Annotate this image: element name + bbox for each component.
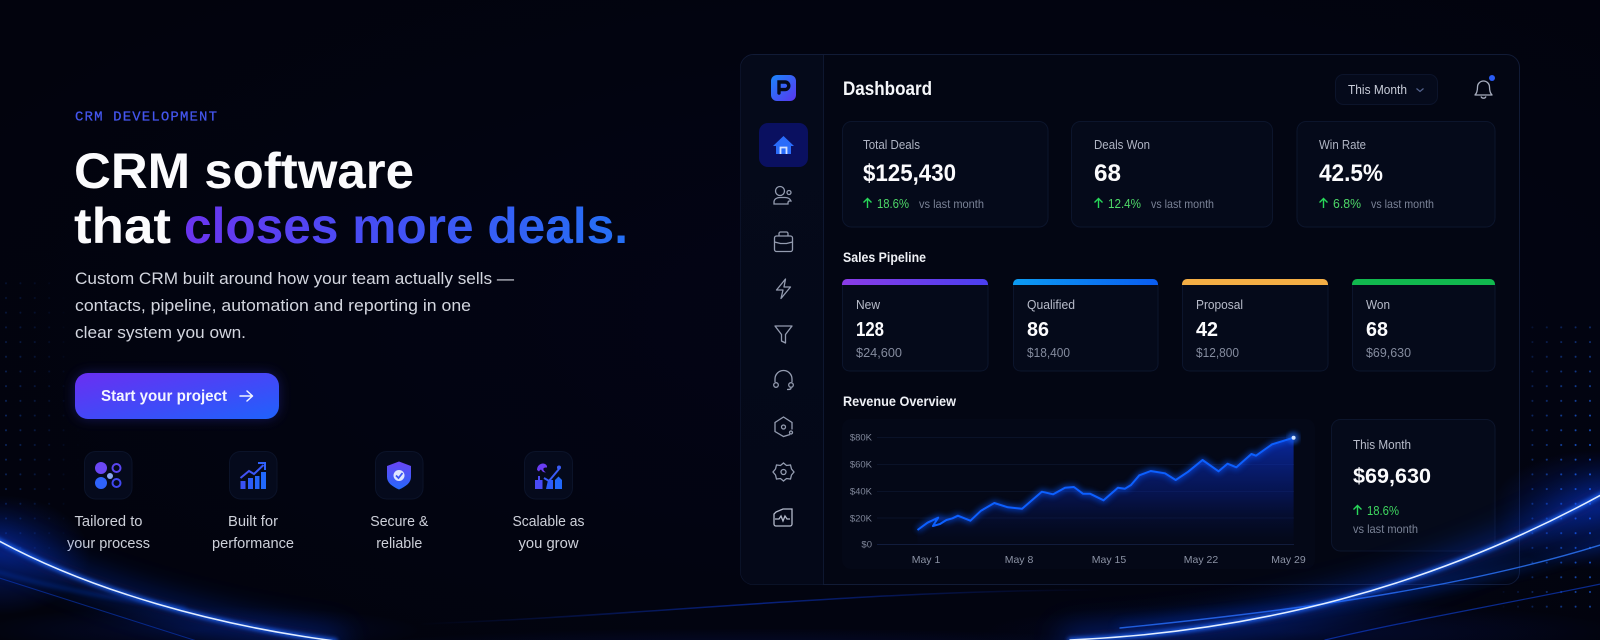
stat card: deals won: 68 — [1094, 160, 1121, 187]
pipeline card: won: 68 — [1366, 319, 1388, 341]
feature: scalable as you grow — [512, 452, 584, 552]
chart gridlines — [877, 438, 1294, 544]
dropdown: this month: This Month — [1348, 82, 1407, 97]
title: CRM software — [74, 143, 414, 199]
chart x axis labels: May 29 — [1271, 554, 1306, 566]
feature: secure and reliable — [370, 452, 429, 552]
chart end marker — [1288, 432, 1300, 444]
dropdown: this month — [1336, 74, 1438, 104]
chart y axis labels: $40K — [850, 486, 873, 498]
pipeline card: proposal: Proposal — [1196, 298, 1243, 312]
heading: revenue overview: Revenue Overview — [843, 394, 956, 409]
stat card: this month: 18.6% — [1367, 503, 1399, 518]
pipeline card: new — [842, 279, 988, 371]
feature: built for performance: Built for — [228, 514, 278, 530]
stat card: total deals: vs last month — [919, 197, 984, 211]
pipeline card: won: Won — [1366, 298, 1390, 312]
eyebrow: CRM DEVELOPMENT — [75, 110, 217, 126]
stat card: win rate: 42.5% — [1319, 160, 1383, 187]
stat card: win rate: Win Rate — [1319, 138, 1366, 152]
title: that — [74, 198, 171, 254]
stat card: win rate: vs last month — [1371, 197, 1434, 211]
feature: secure and reliable: Secure & — [370, 514, 429, 530]
title — [74, 143, 628, 254]
chart y axis labels — [850, 432, 873, 550]
icon: contacts — [774, 186, 791, 204]
icon: home (active) — [759, 123, 808, 167]
pipeline card: new: New — [856, 298, 881, 312]
stat card: this month: vs last month — [1353, 522, 1418, 536]
pipeline card: proposal — [1182, 279, 1328, 371]
pipeline card: qualified: 86 — [1027, 319, 1049, 341]
pipeline card: qualified: Qualified — [1027, 298, 1075, 312]
icon: hex settings — [775, 417, 792, 436]
icon: funnel — [775, 326, 792, 343]
icon: gear — [773, 463, 794, 481]
chart x axis labels: May 22 — [1184, 554, 1218, 566]
stat card: win rate: 6.8% — [1333, 196, 1361, 211]
stat card: deals won: Deals Won — [1094, 138, 1150, 152]
panel: sidebar — [740, 55, 824, 584]
description: contacts, pipeline, automation and reporting in one — [75, 296, 471, 315]
stat card: total deals: Total Deals — [863, 138, 920, 152]
feature: scalable as you grow: Scalable as — [512, 514, 584, 530]
icon: headset — [774, 370, 793, 390]
stat card: total deals — [842, 122, 1048, 227]
pipeline card: won — [1352, 279, 1495, 371]
pipeline card: proposal: 42 — [1196, 319, 1218, 341]
chart y axis labels: $80K — [850, 432, 873, 444]
icon: bolt — [776, 279, 790, 298]
icon: growth chart — [240, 463, 266, 489]
button: start your project — [75, 373, 279, 419]
chart x axis labels: May 15 — [1092, 554, 1126, 566]
title: closes more deals. — [184, 198, 628, 254]
feature: scalable as you grow: you grow — [518, 536, 579, 552]
chart x axis labels: May 1 — [912, 554, 940, 566]
icon: notification bell — [1475, 75, 1495, 98]
stat card: win rate — [1297, 122, 1495, 227]
pipeline card: new: $24,600 — [856, 346, 902, 360]
chart line — [918, 438, 1294, 530]
description: Custom CRM built around how your team actually sells — — [75, 269, 514, 288]
description: clear system you own. — [75, 323, 246, 342]
feature: built for performance: performance — [212, 536, 294, 552]
pipeline card: qualified — [1013, 279, 1158, 371]
stat card: this month: This Month — [1353, 438, 1411, 452]
stat card: this month — [1332, 420, 1495, 551]
chart y axis labels: $0 — [861, 540, 872, 550]
stat card: total deals: 18.6% — [877, 196, 909, 211]
button: start your project: Start your project — [101, 388, 227, 405]
icon: logo — [771, 75, 796, 101]
stat card: total deals: $125,430 — [863, 160, 956, 187]
icon: shield — [387, 462, 411, 490]
heading: dashboard: Dashboard — [843, 79, 932, 100]
icon: briefcase — [774, 232, 792, 252]
feature: built for performance — [212, 452, 294, 552]
icon: nodes — [95, 462, 120, 489]
panel: dashboard window — [740, 54, 1520, 584]
description — [75, 269, 514, 342]
feature: secure and reliable: reliable — [376, 536, 422, 552]
feature: tailored to your process — [67, 452, 150, 552]
hero text block — [74, 110, 628, 342]
pipeline card: won: $69,630 — [1366, 346, 1411, 360]
pipeline card: proposal: $12,800 — [1196, 346, 1239, 360]
feature: tailored to your process: your process — [67, 536, 150, 552]
pipeline card: new: 128 — [856, 319, 884, 341]
chart x axis labels — [912, 554, 1306, 566]
chart x axis labels: May 8 — [1005, 554, 1033, 566]
stat card: deals won — [1072, 122, 1272, 227]
chart y axis labels: $60K — [850, 460, 873, 470]
chart: revenue overview — [842, 419, 1315, 569]
chart line glow — [918, 438, 1294, 530]
pipeline card: qualified: $18,400 — [1027, 346, 1070, 360]
dot grid: left — [5, 282, 64, 549]
heading: sales pipeline: Sales Pipeline — [843, 250, 926, 265]
dot grid: right — [1502, 326, 1591, 608]
decoration: glowing light curves — [0, 450, 1600, 640]
stat card: deals won: vs last month — [1151, 197, 1214, 211]
icon: analytics — [774, 509, 792, 526]
stat card: this month: $69,630 — [1353, 465, 1431, 488]
stat card: deals won: 12.4% — [1108, 196, 1141, 211]
chart y axis labels: $20K — [850, 514, 873, 524]
chart area fill — [918, 438, 1294, 544]
feature: tailored to your process: Tailored to — [74, 514, 142, 530]
icon: scaling bars — [535, 464, 562, 489]
